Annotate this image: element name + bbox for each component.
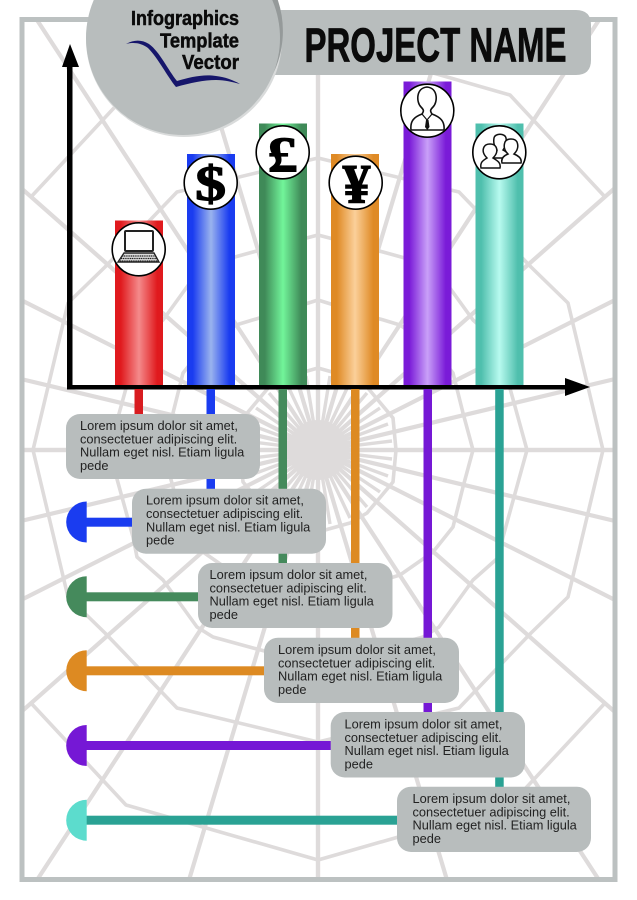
text box 4: consectetuer adipiscing elit. — [278, 655, 435, 670]
connector: purple — [66, 389, 432, 766]
text box 2: pede — [146, 533, 174, 548]
text box 4: Nullam eget nisl. Etiam ligula — [278, 669, 443, 684]
logo circle — [86, 0, 283, 137]
connector: teal — [66, 389, 504, 841]
text box 5: Lorem ipsum dolor sit amet, — [344, 716, 502, 732]
title banner — [262, 10, 591, 75]
logo text — [131, 8, 239, 74]
bar chart — [62, 44, 590, 396]
text box 3 — [198, 563, 392, 628]
icon: pound — [256, 126, 309, 182]
text box 1: consectetuer adipiscing elit. — [80, 431, 237, 446]
x axis arrow — [67, 378, 590, 396]
bar: purple — [404, 82, 452, 386]
icon: dollar — [184, 155, 237, 211]
text box 6 — [397, 787, 591, 852]
icon: yen: ¥ — [343, 154, 371, 214]
text box 2: consectetuer adipiscing elit. — [146, 506, 303, 521]
marker: blue — [66, 502, 87, 542]
marker: teal — [66, 800, 87, 841]
bar: green — [259, 124, 307, 386]
icon: pound: £ — [268, 126, 298, 182]
bar: blue — [187, 154, 235, 386]
text box 3: Nullam eget nisl. Etiam ligula — [210, 594, 375, 609]
text box 5: Nullam eget nisl. Etiam ligula — [344, 743, 510, 758]
y axis arrow — [62, 44, 79, 387]
logo text: Infographics — [131, 8, 239, 30]
text box 5: consectetuer adipiscing elit. — [344, 730, 502, 745]
marker: purple — [66, 725, 87, 766]
icon: group of people — [473, 126, 526, 179]
text box 6: pede — [412, 831, 441, 846]
logo text: Template — [160, 30, 239, 52]
text box 6: consectetuer adipiscing elit. — [412, 804, 570, 819]
bar: red — [115, 220, 163, 386]
text box 5: pede — [344, 756, 373, 772]
marker: green — [66, 576, 87, 617]
text box 5 — [331, 712, 525, 778]
connector: blue — [66, 389, 215, 542]
text box 1: pede — [80, 458, 108, 473]
text box 1: Lorem ipsum dolor sit amet, — [80, 418, 238, 433]
icon: laptop — [112, 223, 165, 276]
icon: business person — [401, 84, 454, 137]
icon: yen — [329, 154, 382, 214]
text box 2 — [132, 489, 326, 554]
text box 3: pede — [210, 607, 238, 622]
text box 6: Nullam eget nisl. Etiam ligula — [412, 818, 578, 833]
text box 1: Nullam eget nisl. Etiam ligula — [80, 445, 245, 460]
text box 2: Lorem ipsum dolor sit amet, — [146, 493, 304, 508]
text box 6: Lorem ipsum dolor sit amet, — [412, 791, 570, 806]
text box 4 — [264, 638, 459, 703]
text box 2: Nullam eget nisl. Etiam ligula — [146, 519, 311, 534]
text box 3: Lorem ipsum dolor sit amet, — [210, 567, 367, 582]
connector: green — [66, 389, 287, 617]
text box 3: consectetuer adipiscing elit. — [210, 580, 367, 595]
bar: orange — [331, 154, 379, 386]
text box 4: Lorem ipsum dolor sit amet, — [278, 642, 436, 657]
text box 4: pede — [278, 682, 306, 697]
marker: orange — [66, 650, 87, 691]
logo text: Vector — [182, 52, 239, 74]
bar: teal — [476, 124, 524, 386]
connector: red — [134, 389, 143, 419]
logo swoosh — [126, 41, 240, 87]
text box 1 — [66, 414, 260, 479]
icon: dollar: $ — [195, 155, 226, 211]
connector: orange — [66, 389, 360, 691]
